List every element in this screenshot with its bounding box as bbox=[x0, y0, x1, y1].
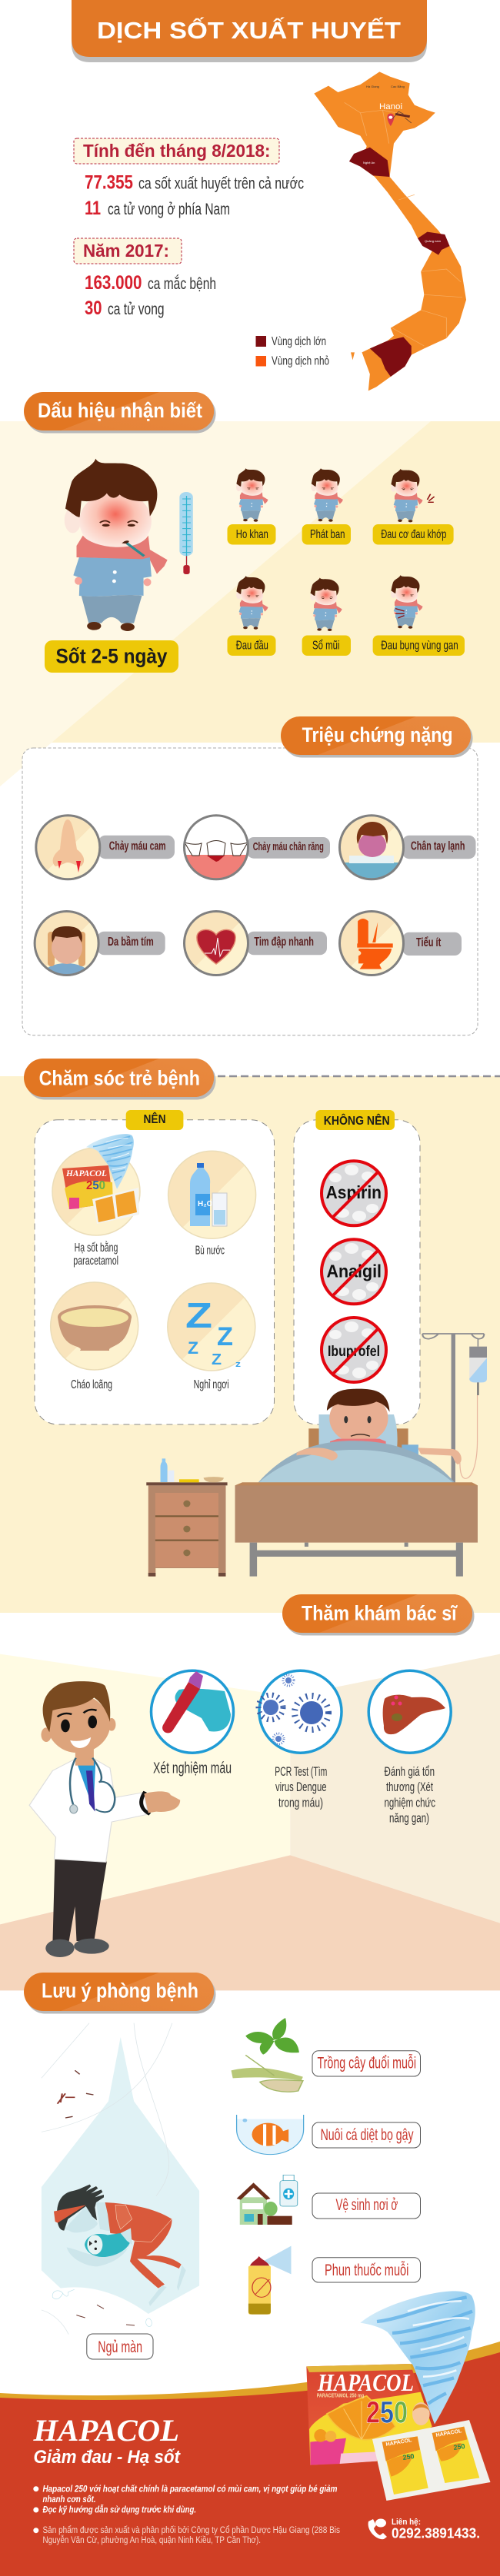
illustration: feverish boy bbox=[65, 459, 193, 631]
map legend: Vùng dịch lớn bbox=[272, 335, 326, 348]
sachets bbox=[372, 2420, 491, 2501]
item: rest: Z bbox=[217, 1322, 233, 1351]
stat: 77.355: 77.355 bbox=[85, 172, 133, 194]
caption: Hạ sốt bằng bbox=[75, 1241, 118, 1255]
symptom: Chan tay lanh bbox=[338, 816, 475, 881]
sachet text: HAPACOL bbox=[435, 2428, 463, 2438]
map label: Nghe An: Nghệ An bbox=[363, 161, 375, 165]
symptom: Tim dap nhanh: Tim đập nhanh bbox=[254, 936, 314, 949]
heading box 2017: Năm 2017: bbox=[83, 241, 169, 261]
item: paracetamol: HAPACOL bbox=[65, 1168, 107, 1178]
heading: Cham soc tre benh bbox=[24, 1059, 215, 1099]
heading: Tham kham bac si: Thăm khám bác sĩ bbox=[302, 1601, 458, 1624]
heading box 2018: Tính đến tháng 8/2018: bbox=[83, 141, 271, 161]
product: Hapacol box with tornado bbox=[306, 2291, 491, 2501]
sign label: Dau co dau khop bbox=[373, 524, 454, 544]
forbidden: Ibuprofel bbox=[322, 1318, 386, 1382]
symptom: Tieu it bbox=[340, 912, 462, 975]
sign label: Dau dau: Đau đầu bbox=[236, 640, 268, 652]
sign label: Dau co dau khop: Đau cơ đau khớp bbox=[381, 528, 446, 541]
forbidden: Aspirin bbox=[322, 1161, 386, 1225]
map legend: Vùng dịch nhỏ bbox=[272, 355, 329, 367]
icon: mosquito spray bbox=[248, 2246, 291, 2315]
product number: 250 bbox=[366, 2396, 408, 2430]
stat: 11: 11 bbox=[85, 198, 101, 219]
product box bbox=[306, 2364, 432, 2465]
caption: thương (Xét bbox=[386, 1780, 433, 1794]
label: Sot 2-5 ngay bbox=[45, 640, 178, 673]
heading box 2017 bbox=[74, 238, 182, 264]
stats block 2018 bbox=[74, 138, 304, 219]
label: Ngu man: Ngủ màn bbox=[98, 2338, 142, 2356]
forbidden: Aspirin: Aspirin bbox=[326, 1182, 382, 1202]
label: Sot 2-5 ngay: Sốt 2-5 ngày bbox=[55, 644, 168, 667]
sign label: So mui bbox=[302, 635, 351, 656]
heading: Luu y phong benh: Lưu ý phòng bệnh bbox=[42, 1979, 198, 2002]
item: rehydrate: H₂O bbox=[198, 1200, 213, 1208]
item: rest bbox=[168, 1283, 255, 1391]
heading: Luu y phong benh bbox=[24, 1973, 215, 2014]
map label: Quang Nam: Quảng nam bbox=[425, 239, 442, 243]
test: blood bbox=[151, 1670, 234, 1777]
map of Vietnam bbox=[314, 71, 466, 391]
sign label: Dau bung vung gan bbox=[373, 635, 465, 656]
symptom: Tim dap nhanh bbox=[185, 912, 327, 975]
forbidden: Ibuprofel: Ibuprofel bbox=[328, 1344, 380, 1360]
icon: basil and lemongrass bbox=[232, 2018, 303, 2092]
background: exam room bbox=[0, 1654, 500, 1990]
sign label: So mui: Sổ mũi bbox=[312, 638, 340, 652]
item: paracetamol bbox=[52, 1134, 140, 1268]
heading: Trieu chung nang bbox=[281, 716, 472, 758]
sachet number: 250 bbox=[402, 2452, 415, 2461]
icon: thermometer bbox=[179, 492, 193, 574]
sign label: Dau dau bbox=[228, 635, 275, 656]
footer notes: nhanh cơn sốt. bbox=[43, 2495, 95, 2505]
tag: NEN bbox=[126, 1110, 183, 1130]
label: Nuoi ca diet bo gay: Nuôi cá diệt bọ gậy bbox=[321, 2126, 414, 2144]
sachet number: 250 bbox=[453, 2442, 465, 2451]
label: Phun thuoc muoi bbox=[312, 2258, 420, 2282]
icon: phone bbox=[368, 2518, 387, 2539]
icon: clean house bbox=[237, 2175, 298, 2225]
tag: NEN: NÊN bbox=[143, 1112, 166, 1126]
contact phone: 0292.3891433. bbox=[392, 2526, 480, 2541]
symptom: Chay mau cam: Chảy máu cam bbox=[109, 840, 166, 853]
caption: paracetamol bbox=[73, 1255, 118, 1268]
test: PCR bbox=[258, 1670, 342, 1810]
footer brand: HAPACOL: HAPACOL bbox=[32, 2413, 179, 2448]
stat: 163.000: 163.000 bbox=[85, 272, 142, 294]
map label: Ha Giang: Hà Giang bbox=[366, 85, 379, 88]
symptom: Chay mau chan rang bbox=[183, 816, 330, 882]
sign icons: small boys bbox=[236, 468, 435, 631]
item: rest: Z bbox=[188, 1338, 198, 1358]
caption: virus Dengue bbox=[275, 1780, 326, 1794]
footer notes: Đọc kỹ hướng dẫn sử dụng trước khi dùng. bbox=[43, 2505, 196, 2515]
label: Nuoi ca diet bo gay bbox=[312, 2122, 420, 2148]
symptom: Tieu it: Tiểu ít bbox=[416, 936, 442, 949]
footer notes: Nguyễn Văn Cừ, phường An Hoà, quận Ninh Kiều, TP Cần Thơ). bbox=[43, 2535, 261, 2545]
symptom: Da bam tim bbox=[34, 910, 165, 976]
illustration: mother and baby under net bbox=[52, 2185, 186, 2327]
illustration: nightstand bbox=[146, 1458, 228, 1577]
title text: DỊCH SỐT XUẤT HUYẾT bbox=[97, 16, 401, 44]
symptom: Chan tay lanh: Chân tay lạnh bbox=[411, 840, 465, 853]
label: Ve sinh noi o bbox=[312, 2193, 420, 2219]
stat text: ca mắc bệnh bbox=[148, 275, 216, 293]
sachet text: HAPACOL bbox=[385, 2438, 413, 2448]
caption: Bù nước bbox=[195, 1245, 225, 1258]
map label: Cao Bang: Cao Bằng bbox=[391, 85, 405, 88]
map legend bbox=[255, 335, 329, 367]
illustration: doctor bbox=[29, 1681, 180, 1957]
contact bbox=[368, 2518, 480, 2541]
label: Ve sinh noi o: Vệ sinh nơi ở bbox=[335, 2196, 398, 2214]
map label: Hanoi: Hanoi bbox=[379, 102, 402, 111]
sign label: Phat ban bbox=[302, 524, 351, 544]
illustration: sick child in bed bbox=[235, 1389, 478, 1577]
symptom: Da bam tim: Da bầm tím bbox=[108, 936, 154, 949]
forbidden: Analgil bbox=[322, 1239, 386, 1304]
caption: Đánh giá tổn bbox=[385, 1765, 435, 1779]
caption: trong máu) bbox=[278, 1797, 323, 1810]
forbidden: Analgil: Analgil bbox=[326, 1261, 382, 1281]
stat text: ca tử vong ở phía Nam bbox=[108, 201, 230, 218]
contact label: Liên hệ: bbox=[392, 2518, 421, 2527]
icon: fish bowl bbox=[237, 2115, 304, 2155]
heading: Dau hieu nhan biet: Dấu hiệu nhận biết bbox=[38, 399, 202, 422]
caption: PCR Test (Tìm bbox=[275, 1765, 327, 1779]
panel: KHONG NEN bbox=[294, 1110, 420, 1424]
footer notes: Sản phẩm được sản xuất và phân phối bởi Công ty Cổ phần Dược Hậu Giang (288 Bis bbox=[43, 2526, 340, 2535]
caption: Cháo loãng bbox=[71, 1378, 112, 1391]
tag: KHONG NEN: KHÔNG NÊN bbox=[324, 1113, 390, 1128]
item: porridge bbox=[51, 1282, 138, 1391]
item: rehydrate bbox=[168, 1151, 256, 1258]
caption: Xét nghiệm máu bbox=[153, 1760, 232, 1777]
heading: Cham soc tre benh: Chăm sóc trẻ bệnh bbox=[39, 1067, 200, 1090]
footer tagline: Giảm đau - Hạ sốt bbox=[34, 2447, 181, 2468]
item: paracetamol: 250 bbox=[86, 1179, 105, 1192]
heading: Dau hieu nhan biet bbox=[24, 392, 215, 434]
test: liver bbox=[368, 1670, 451, 1826]
item: rest: Z bbox=[212, 1351, 222, 1368]
item: rest: Z bbox=[185, 1295, 212, 1335]
panel: NEN bbox=[35, 1110, 274, 1424]
sign label: Ho khan: Ho khan bbox=[236, 528, 268, 541]
product name: HAPACOL bbox=[317, 2368, 414, 2396]
heading: Tham kham bac si bbox=[282, 1594, 474, 1636]
icon: toilet bbox=[357, 919, 393, 969]
label: Phun thuoc muoi: Phun thuốc muỗi bbox=[325, 2262, 408, 2279]
panel: severe symptoms bbox=[22, 748, 478, 1035]
symptom: Chay mau chan rang: Chảy máu chân răng bbox=[253, 840, 324, 853]
stat text: ca tử vong bbox=[108, 301, 165, 318]
caption: Nghỉ ngơi bbox=[194, 1378, 229, 1391]
label: Ngu man bbox=[87, 2334, 153, 2359]
illustration: IV stand bbox=[422, 1334, 487, 1484]
stat text: ca sốt xuất huyết trên cả nước bbox=[138, 175, 304, 192]
footer notes bbox=[33, 2485, 340, 2545]
symptom: Chay mau cam bbox=[36, 816, 175, 879]
divider line bbox=[218, 1075, 500, 1077]
illustration: mosquito net bbox=[42, 2023, 199, 2335]
sign label: Dau bung vung gan: Đau bụng vùng gan bbox=[381, 640, 458, 652]
caption: năng gan) bbox=[389, 1812, 429, 1826]
stats block 2017 bbox=[74, 238, 216, 319]
stat: 30: 30 bbox=[85, 297, 102, 319]
tornado bbox=[360, 2291, 475, 2424]
item: rest: z bbox=[235, 1360, 242, 1369]
sign label: Ho khan bbox=[228, 524, 275, 544]
caption: nghiệm chức bbox=[385, 1797, 435, 1810]
sign label: Phat ban: Phát ban bbox=[310, 528, 345, 541]
label: Trong cay duoi muoi: Trồng cây đuổi muỗi bbox=[317, 2055, 416, 2072]
heading: Trieu chung nang: Triệu chứng nặng bbox=[302, 723, 453, 746]
footer notes: Hapacol 250 với hoạt chất chính là paracetamol có mùi cam, vị ngọt giúp bé giảm bbox=[43, 2485, 337, 2494]
title banner bbox=[72, 0, 427, 62]
label: Trong cay duoi muoi bbox=[312, 2051, 420, 2076]
dosage: PARACETAMOL 250 mg bbox=[317, 2394, 364, 2398]
tag: KHONG NEN bbox=[315, 1110, 395, 1130]
background: footer band bbox=[0, 2342, 500, 2576]
